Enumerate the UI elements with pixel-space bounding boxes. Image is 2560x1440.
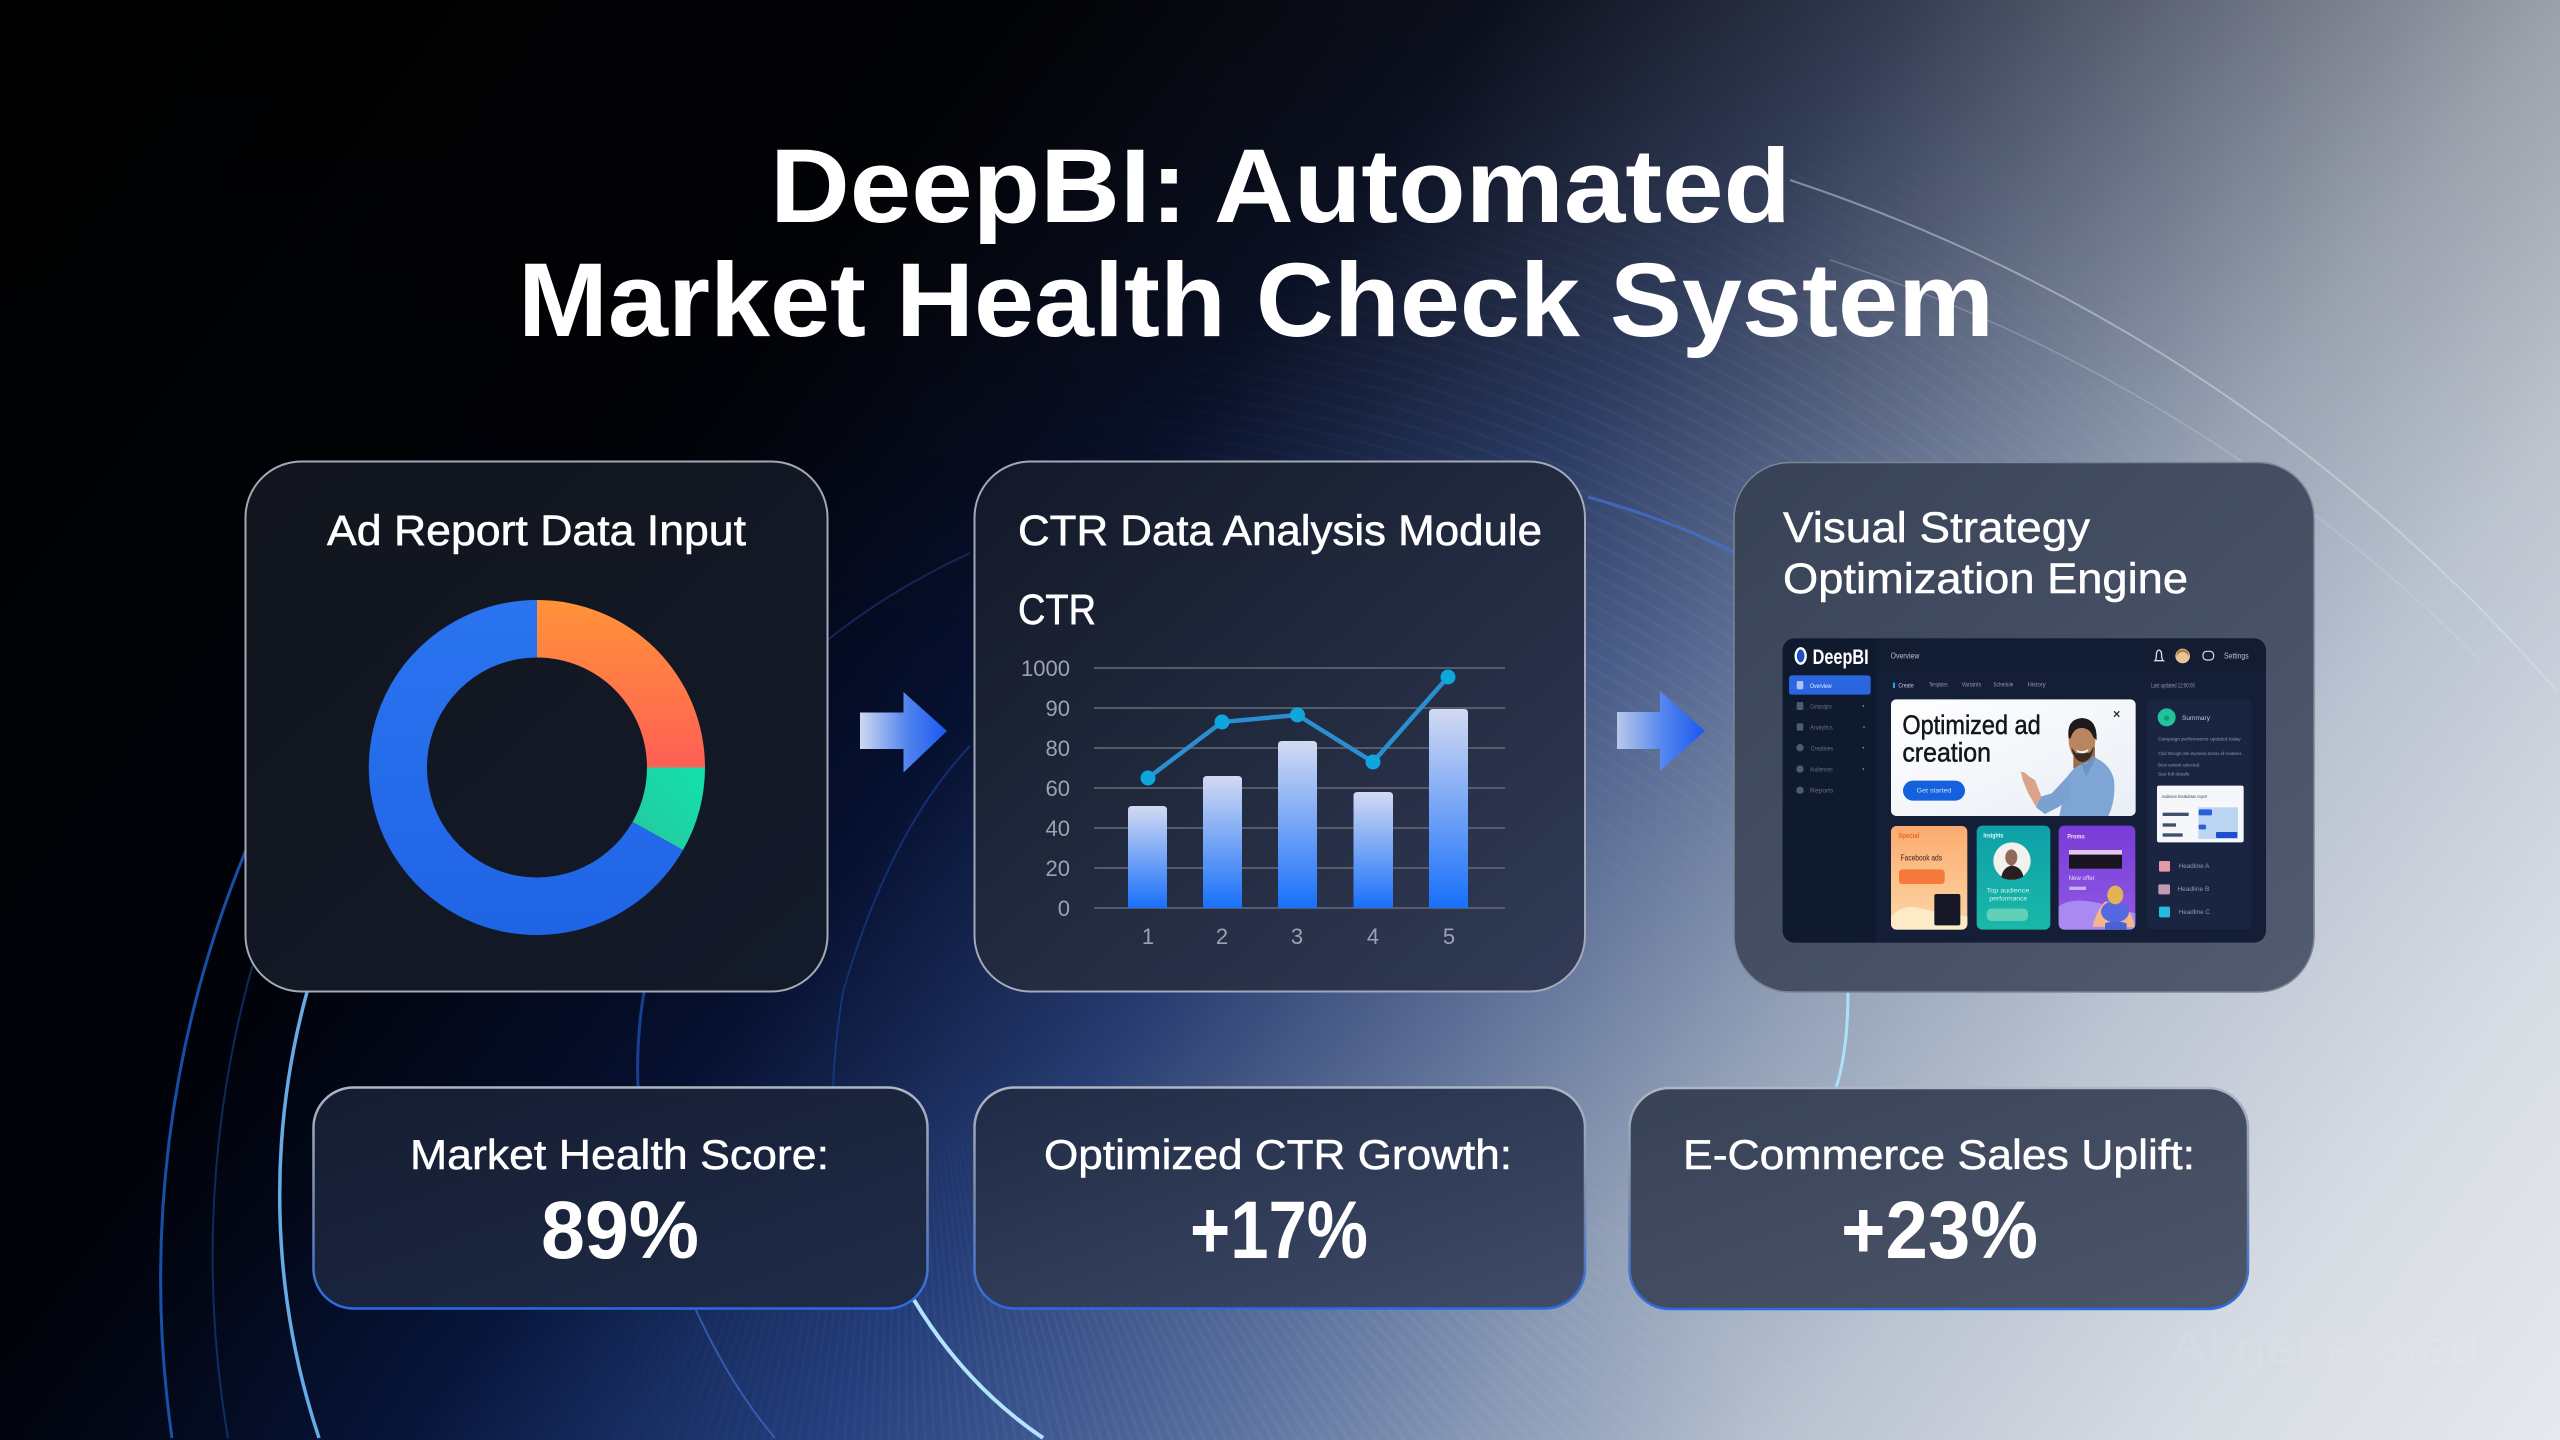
right insights panel	[2147, 699, 2252, 929]
dashboard tabs: Schedule	[1993, 682, 2014, 689]
donut chart	[369, 600, 705, 935]
dashboard sidebar	[1789, 675, 1871, 795]
combo chart: 5	[1443, 924, 1455, 949]
orange ad card: Facebook ads	[1901, 853, 1942, 863]
dashboard top bar	[1796, 638, 2266, 671]
title: Market Health Check System	[518, 242, 1994, 359]
arrow: analysis to engine	[1617, 691, 1705, 771]
title: DeepBI: Automated	[770, 128, 1791, 245]
right insights panel: Best variant selected	[2158, 762, 2200, 768]
orange ad card	[1891, 826, 1967, 930]
dashboard tabs: Templates	[1929, 682, 1948, 689]
heading: visual strategy	[1783, 504, 2188, 603]
chart title: CTR	[1018, 586, 1096, 634]
right insights panel: Audience breakdown report	[2162, 794, 2207, 800]
panel: visual strategy engine	[1734, 462, 2314, 992]
hero ad card	[1891, 699, 2136, 816]
stat card: e-commerce sales uplift	[1630, 1088, 2248, 1309]
teal ad card: Top audience	[1987, 889, 2030, 895]
combo chart: 20	[1046, 856, 1070, 881]
dashboard tabs: Last updated 12:00:00	[2151, 683, 2195, 690]
dashboard mockup	[1783, 638, 2266, 943]
stat card: e-commerce sales uplift: +23%	[1841, 1185, 2038, 1276]
combo chart: 0	[1058, 896, 1070, 921]
stat card: e-commerce sales uplift: E-Commerce Sales Uplift:	[1683, 1131, 2195, 1178]
right insights panel: Headline B	[2177, 887, 2209, 893]
title	[518, 128, 1994, 359]
right insights panel: Click through rate improved across all creatives	[2158, 751, 2242, 757]
hero ad card: Get started	[1917, 788, 1952, 795]
combo chart	[1021, 656, 1505, 949]
dashboard top bar: DeepBI	[1813, 645, 1869, 669]
arrow: input to analysis	[860, 692, 947, 772]
panel: ctr data analysis	[974, 462, 1585, 992]
dashboard tabs: Variants	[1962, 682, 1981, 689]
illustrated presenter	[2021, 718, 2114, 816]
combo chart: 3	[1291, 924, 1303, 949]
purple ad card: Promo	[2067, 835, 2085, 841]
teal ad card	[1977, 826, 2050, 930]
stat card: market health score: 89%	[541, 1185, 699, 1276]
combo chart: 1	[1142, 924, 1154, 949]
dashboard tabs: Create	[1898, 682, 1914, 689]
dashboard sidebar: Reports	[1810, 788, 1834, 795]
heading: ad report: Ad Report Data Input	[327, 507, 746, 555]
hero ad card: Optimized ad	[1902, 710, 2041, 740]
watermark: AI generated	[2170, 1321, 2480, 1373]
combo chart: 2	[1216, 924, 1228, 949]
right insights panel: Headline A	[2179, 864, 2209, 870]
combo chart: 90	[1046, 696, 1070, 721]
purple ad card	[2059, 826, 2135, 930]
stat card: market health score	[314, 1088, 928, 1308]
right insights panel: Headline C	[2179, 910, 2211, 916]
combo chart: 40	[1046, 816, 1070, 841]
heading: ctr module: CTR Data Analysis Module	[1018, 507, 1542, 555]
dashboard sidebar: Audiences	[1810, 766, 1833, 773]
right insights panel: Summary	[2182, 715, 2211, 722]
dashboard sidebar: Overview	[1810, 683, 1832, 690]
purple ad card: New offer	[2069, 876, 2095, 882]
teal ad card: Insights	[1983, 833, 2004, 839]
teal ad card: performance	[1989, 897, 2028, 903]
right insights panel: See full details	[2158, 771, 2190, 777]
stat card: optimized ctr growth: Optimized CTR Growth:	[1044, 1131, 1512, 1178]
dashboard tabs	[1893, 682, 2195, 690]
stat card: market health score: Market Health Score:	[410, 1131, 829, 1178]
stat card: optimized ctr growth: +17%	[1190, 1185, 1368, 1276]
dashboard top bar: Settings	[2224, 651, 2249, 660]
combo chart: 60	[1046, 776, 1070, 801]
dashboard sidebar: Campaigns	[1810, 703, 1832, 710]
panel: ad report data input	[246, 462, 828, 992]
heading: visual strategy: Visual Strategy	[1783, 504, 2091, 552]
dashboard sidebar: Creatives	[1811, 745, 1834, 752]
combo chart: 80	[1046, 736, 1070, 761]
dashboard tabs: History	[2028, 682, 2046, 689]
hero ad card: creation	[1902, 738, 1991, 768]
orange ad card: Special	[1898, 831, 1919, 840]
combo chart: 4	[1367, 924, 1379, 949]
stat card: optimized ctr growth	[974, 1088, 1585, 1308]
heading: visual strategy: Optimization Engine	[1783, 555, 2188, 603]
right insights panel: Campaign performance updated today	[2158, 736, 2241, 742]
combo chart: 1000	[1021, 656, 1070, 681]
dashboard sidebar: Analytics	[1810, 724, 1833, 731]
dashboard top bar: Overview	[1891, 652, 1920, 661]
